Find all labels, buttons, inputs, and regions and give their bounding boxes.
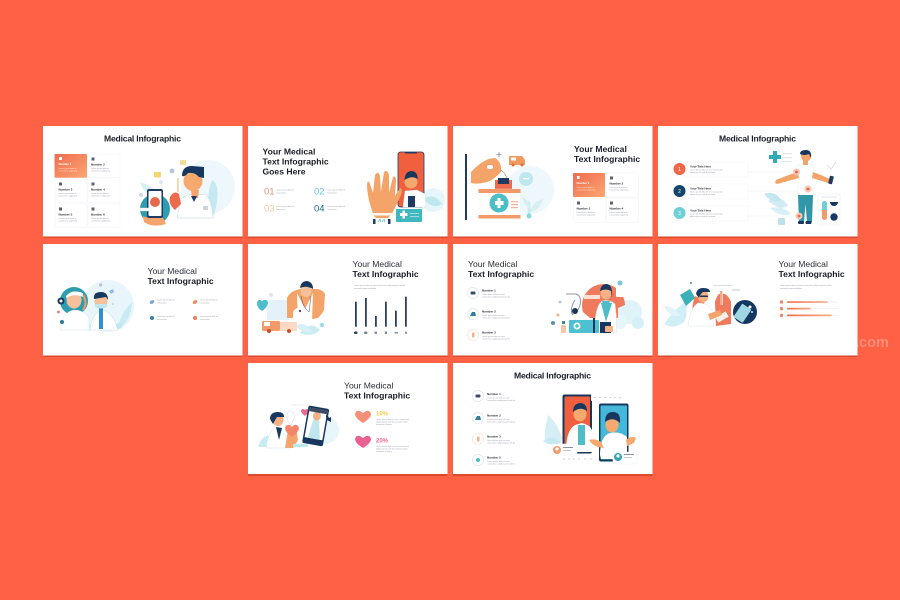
panel: slide 8: [658, 244, 858, 357]
card grid: slide 1: Number 3: [58, 188, 73, 192]
heading: slide 1 title: Medical Infographic: [104, 134, 181, 144]
card grid: slide 1: Number 4: [91, 188, 105, 192]
numbered rows: slide 4: adipiscing elit sed do eiusmod: [690, 215, 715, 218]
icon list: slide 10: Number 3: [487, 434, 501, 438]
illustration: hand holding phone doctor: [367, 152, 445, 224]
numbered rows: slide 4: Your Title Here: [690, 186, 711, 190]
card grid: slide 1: Number 5: [58, 212, 73, 216]
heading: slide 10 title: Medical Infographic: [514, 370, 591, 380]
icon list: slide 10: Number 5: [487, 456, 501, 460]
card grid: slide 3: Number 4: [610, 206, 624, 210]
paragraph: slide 6: eiusmod tempor incididunt: [354, 287, 377, 290]
icon list: slide 5: Lorem ipsum dolor sit: [157, 315, 176, 318]
icon list: slide 5: consectetur: [157, 302, 167, 304]
heading: slide 8 title: Your Medical: [778, 259, 828, 269]
numbered rows: slide 4: Lorem ipsum dolor sit amet consectetur: [690, 168, 723, 172]
card grid: slide 3: consectetur adipiscing: [576, 214, 595, 216]
icon list: slide 10: consectetur adipiscing elit sed do: [487, 462, 515, 466]
numbered rows: slide 4: 2: [678, 189, 681, 195]
illustration: doctor with laptop: [551, 280, 644, 333]
illustration: doctor and phone with hearts: [258, 405, 339, 448]
stat list: slide 9: 20%: [376, 438, 389, 444]
numbered rows: slide 4: adipiscing elit sed do eiusmod: [690, 171, 715, 174]
stat list: slide 9: [355, 411, 409, 453]
card grid: slide 1: Lorem ipsum dolor sit: [58, 217, 77, 220]
icon list: slide 7: consectetur adipiscing elit sed do: [482, 296, 510, 298]
illustration: doctor and ambulance: [257, 281, 325, 335]
stat list: slide 9: 10%: [376, 412, 389, 418]
card grid: slide 3: Lorem ipsum dolor sit: [610, 186, 628, 189]
card grid: slide 1: consectetur adipiscing: [58, 170, 77, 172]
icon list: slide 5: Lorem ipsum dolor sit: [200, 315, 219, 318]
heading: slide 5 title: Your Medical: [148, 266, 197, 276]
stat list: slide 9: incididunt ut labore: [376, 423, 392, 426]
numbered list: slide 2: Lorem ipsum dolor sit: [327, 205, 346, 208]
icon list: slide 5: [149, 298, 219, 321]
illustration: medical kit and hand: [465, 152, 554, 220]
paragraph: slide 6: Lorem ipsum dolor sit amet consectetur adipiscing elit sed do: [354, 285, 405, 287]
illustration: doctor with phone: [139, 160, 235, 226]
card grid: slide 3: Number 3: [576, 206, 591, 210]
icon list: slide 5: consectetur: [200, 318, 210, 321]
panel: slide 5: [43, 244, 242, 357]
icon list: slide 5: consectetur: [200, 302, 210, 304]
icon list: slide 10: Lorem ipsum dolor sit amet: [487, 396, 510, 400]
icon list: slide 10: consectetur adipiscing elit sed do: [487, 399, 515, 402]
numbered list: slide 2: 03: [264, 204, 275, 214]
icon list: slide 5: consectetur: [157, 318, 167, 321]
card grid: slide 1: [54, 154, 120, 228]
heading: slide 2 title: Text Infographic: [262, 156, 329, 166]
card grid: slide 3: Number 1: [576, 181, 590, 185]
watermark: .com: [855, 335, 889, 351]
heading: slide 6 title: Text Infographic: [352, 269, 419, 279]
icon: orange heart: [355, 411, 371, 423]
stat list: slide 9: Lorem ipsum dolor sit amet consectetur: [376, 418, 409, 421]
card grid: slide 3: Lorem ipsum dolor sit: [576, 186, 595, 189]
card grid: slide 1: Lorem ipsum dolor sit: [91, 167, 110, 170]
numbered rows: slide 4: Your Title Here: [690, 208, 711, 212]
numbered rows: slide 4: 1: [678, 167, 681, 173]
card grid: slide 3: Lorem ipsum dolor sit: [576, 211, 595, 214]
panel: slide 1: [43, 126, 242, 238]
heading: slide 3 title: Your Medical: [574, 144, 627, 154]
numbered list: slide 2: consectetur: [276, 192, 286, 194]
stat list: slide 9: adipiscing elit sed do eiusmod tempor: [376, 420, 408, 424]
numbered list: slide 2: consectetur: [327, 192, 337, 194]
card grid: slide 1: Number 6: [91, 212, 105, 216]
heading: slide 5 title: Text Infographic: [148, 276, 214, 286]
progress bars: slide 8: [780, 300, 838, 317]
numbered rows: slide 4: Lorem ipsum dolor sit amet consectetur: [690, 190, 723, 194]
card grid: slide 3: Number 2: [610, 182, 624, 186]
card grid: slide 3: [573, 173, 638, 222]
heading: slide 9 title: Text Infographic: [344, 390, 410, 400]
numbered list: slide 2: 01: [264, 186, 275, 198]
card grid: slide 3: consectetur adipiscing: [576, 188, 595, 192]
card grid: slide 1: Lorem ipsum dolor sit: [58, 167, 77, 170]
panel: slide 6: [248, 244, 448, 357]
numbered rows: slide 4: 3: [678, 211, 681, 217]
illustration: two doctors: [57, 280, 134, 332]
card grid: slide 1: Number 2: [91, 162, 105, 166]
icon list: slide 7: consectetur adipiscing elit sed do: [482, 316, 510, 320]
card grid: slide 3: Lorem ipsum dolor sit: [610, 211, 628, 214]
numbered rows: slide 4: adipiscing elit sed do eiusmod: [690, 193, 715, 196]
numbered list: slide 2: 02: [314, 186, 325, 198]
panel: slide 2: [248, 126, 448, 238]
numbered rows: slide 4: Lorem ipsum dolor sit amet consectetur: [690, 212, 723, 216]
heading: slide 7 title: Text Infographic: [468, 269, 534, 279]
card grid: slide 3: consectetur adipiscing: [610, 188, 628, 192]
icon list: slide 10: consectetur adipiscing elit sed do: [487, 420, 515, 424]
numbered rows: slide 4: [674, 162, 803, 221]
icon list: slide 10: Number 2: [487, 414, 501, 418]
card grid: slide 1: consectetur adipiscing: [58, 194, 77, 198]
icon list: slide 7: Lorem ipsum dolor sit amet: [482, 314, 505, 317]
stat list: slide 9: adipiscing elit sed do eiusmod tempor: [376, 448, 408, 450]
icon list: slide 7: Lorem ipsum dolor sit amet: [482, 335, 505, 338]
panel: slide 9: [248, 363, 448, 476]
numbered list: slide 2: Lorem ipsum dolor sit: [327, 188, 346, 192]
stat list: slide 9: incididunt ut labore: [376, 450, 392, 453]
heading: slide 7 title: Your Medical: [468, 259, 517, 269]
heading: slide 6 title: Your Medical: [352, 259, 402, 269]
card grid: slide 1: consectetur adipiscing: [91, 194, 110, 198]
heading: slide 2 title: Your Medical: [262, 146, 315, 156]
heading: slide 2 title: Goes Here: [262, 166, 306, 176]
icon list: slide 10: Lorem ipsum dolor sit amet: [487, 439, 510, 442]
panel: slide 10: [453, 363, 652, 476]
illustration: telemedicine phones: [543, 394, 637, 464]
illustration: patient with pain points: [764, 150, 840, 225]
card grid: slide 1: consectetur adipiscing: [58, 220, 77, 222]
icon list: slide 7: Number 2: [482, 310, 496, 314]
panel: slide 3: [453, 126, 652, 238]
card grid: slide 1: Lorem ipsum dolor sit: [58, 192, 77, 195]
heading: slide 8 title: Text Infographic: [778, 269, 845, 279]
numbered list: slide 2: Lorem ipsum dolor sit: [276, 188, 295, 192]
heading: slide 4 title: Medical Infographic: [719, 134, 796, 144]
icon list: slide 7: Lorem ipsum dolor sit amet: [482, 293, 505, 296]
paragraph: slide 8: eiusmod tempor incididunt: [780, 287, 803, 290]
icon list: slide 5: Lorem ipsum dolor sit: [157, 298, 176, 302]
paragraph: slide 8: Lorem ipsum dolor sit amet consectetur adipiscing elit sed do: [780, 285, 831, 287]
numbered list: slide 2: consectetur: [327, 208, 337, 211]
numbered list: slide 2: Lorem ipsum dolor sit: [276, 205, 295, 208]
numbered list: slide 2: 04: [314, 204, 325, 214]
card grid: slide 1: consectetur adipiscing: [91, 220, 110, 222]
panel: slide 7: [453, 244, 652, 357]
icon list: slide 7: [468, 288, 510, 340]
numbered list: slide 2: consectetur: [276, 208, 286, 211]
panel: slide 4: [658, 126, 858, 238]
stat list: slide 9: Lorem ipsum dolor sit amet consectetur: [376, 445, 409, 448]
icon list: slide 10: Lorem ipsum dolor sit amet: [487, 418, 510, 421]
card grid: slide 1: consectetur adipiscing: [91, 170, 110, 172]
card grid: slide 1: Lorem ipsum dolor sit: [91, 192, 110, 195]
heading: slide 3 title: Text Infographic: [574, 154, 640, 164]
icon list: slide 7: consectetur adipiscing elit sed do: [482, 338, 510, 340]
icon list: slide 5: Lorem ipsum dolor sit: [200, 298, 219, 302]
icon list: slide 7: Number 3: [482, 330, 496, 334]
heading: slide 9 title: Your Medical: [344, 380, 393, 390]
icon list: slide 10: Lorem ipsum dolor sit amet: [487, 460, 510, 463]
illustration: doctor with lungs: [664, 282, 757, 327]
icon list: slide 10: Number 1: [487, 392, 501, 396]
numbered list: slide 2: [264, 186, 346, 214]
icon list: slide 10: [472, 390, 515, 466]
card grid: slide 1: Number 1: [58, 162, 72, 166]
icon list: slide 10: consectetur adipiscing elit sed do: [487, 442, 515, 444]
card grid: slide 1: Lorem ipsum dolor sit: [91, 217, 110, 220]
bar chart: slide 6: [354, 297, 407, 334]
icon list: slide 7: Number 1: [482, 288, 496, 292]
card grid: slide 3: consectetur adipiscing: [610, 214, 628, 216]
numbered rows: slide 4: Your Title Here: [690, 164, 711, 168]
